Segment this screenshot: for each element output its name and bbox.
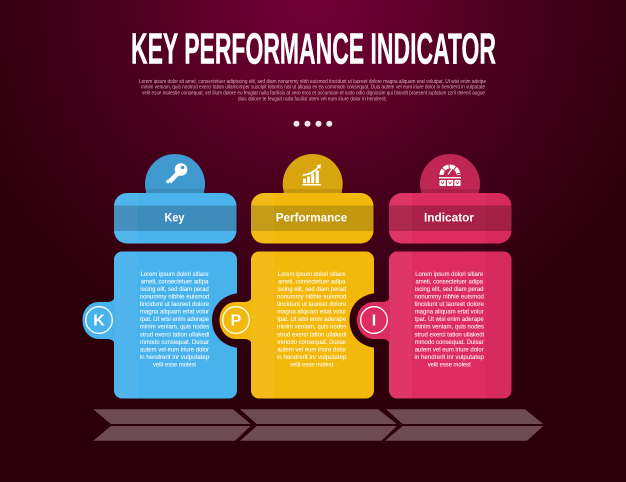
- intro paragraph: Lorem ipsum dolor sit amet, consectetuer adipiscing elit, sed diam nonummy nibh euismod tincidunt ut laoreet dolore magna aliquam erat volutpat. Ut wisi enim adeipe: [139, 79, 486, 85]
- chevron arrows: [93, 409, 543, 441]
- body text: Indicator: strud exerci tation ullakedi: [414, 331, 484, 338]
- intro paragraph: [139, 79, 486, 102]
- body text: Performance: [277, 271, 347, 368]
- body text: Performance: Lorem ipsum dolori sitiare: [278, 271, 346, 278]
- body text: Performance: tincidunt ut laoreet dolore: [277, 301, 347, 308]
- body text: Key: Lorem ipsum dolori sitiare: [140, 271, 209, 278]
- body text: Key: ameti, consectetuer adipa: [141, 278, 209, 286]
- body text: Key: in hendrerit inr vulputatep: [140, 354, 210, 361]
- body text: Performance: autem vel eum iriure dolor: [277, 346, 347, 353]
- header: Indicator: [389, 193, 512, 244]
- body text: Indicator: iscing elit, sed diam perad: [415, 286, 484, 293]
- icon circle: key: [145, 154, 205, 193]
- body card: Indicator: [357, 251, 512, 399]
- body text: Performance: mmodo consequat. Duisar: [277, 339, 347, 346]
- body text: Indicator: magna aliquam eriat volur: [415, 309, 484, 316]
- header: Performance: [251, 193, 374, 244]
- body text: Indicator: minim veniam, quis nodes: [414, 324, 485, 331]
- intro paragraph: velit esse molestie consequat, vel illum dolore eu feugiat nulla facilisis at vero eros et accumsan et iusto odio dignissim qui blandit praesent luptatum zzril delenit augue: [142, 90, 485, 96]
- body text: Performance: strud exerci tation ullakedi: [277, 331, 346, 338]
- body text: Performance: velit esse molest: [290, 361, 333, 368]
- body text: Key: [140, 271, 210, 368]
- header label: Key: Key: [164, 212, 185, 224]
- body text: Indicator: autem vel eum iriure dolor: [415, 346, 484, 353]
- intro paragraph: minim veniam, quis nostrud exerci tation ullamcorper suscipit lobortis nisl ut aliquip ex ea commodo consequat. Duis autem vel eum iriure dolor in hendrerit in vulputate: [141, 85, 485, 91]
- body text: Key: velit esse molest: [153, 361, 196, 368]
- body text: Key: strud exerci tation ullakedi: [140, 331, 209, 338]
- body text: Key: autem vel eum iriure dolor: [140, 346, 210, 353]
- body text: Indicator: velit esse molest: [428, 361, 471, 368]
- intro paragraph: duis dolore te feugait nulla facilisi utem vel eum iriure dolor in hendrerit.: [238, 96, 387, 102]
- column: Indicator: [357, 154, 512, 399]
- body text: Key: tpat. Ut wisi enim aderape: [140, 316, 209, 323]
- body text: Performance: tpat. Ut wisi enim aderape: [277, 316, 347, 323]
- body text: Indicator: [414, 271, 485, 368]
- body text: Key: iscing elit, sed diam perad: [140, 286, 209, 293]
- tab: I: I: [372, 313, 376, 330]
- header label: Performance: Performance: [276, 212, 347, 224]
- body text: Indicator: mmodo consequat. Duisar: [415, 339, 484, 346]
- body text: Performance: ameti, consectetuer adipa: [278, 278, 346, 286]
- header: Key: [114, 193, 237, 244]
- body card: Performance: [220, 251, 375, 399]
- body text: Key: mmodo consequat. Duisar: [140, 339, 210, 346]
- body text: Indicator: tincidunt ut laoreet dolore: [414, 301, 484, 308]
- body text: Key: tincidunt ut laoreet dolore: [140, 301, 210, 308]
- body text: Indicator: ameti, consectetuer adipa: [415, 278, 483, 286]
- column: Performance: [220, 154, 375, 399]
- column: Key: [82, 154, 238, 399]
- body text: Performance: iscing elit, sed diam perad: [277, 286, 346, 293]
- body card: Key: [82, 251, 238, 399]
- body text: Indicator: in hendrerit inr vulputatep: [414, 354, 484, 361]
- icon circle: gauge: [420, 154, 480, 193]
- tab: P: P: [231, 313, 242, 330]
- tab: P: [220, 296, 252, 345]
- tab: K: K: [93, 313, 105, 330]
- body text: Key: magna aliquam eriat volur: [140, 309, 210, 316]
- body text: Indicator: tpat. Ut wisi enim aderape: [415, 316, 484, 323]
- tab: I: [357, 296, 390, 345]
- pagination dots: [294, 121, 332, 127]
- body text: Performance: in hendrerit inr vulputatep: [277, 354, 347, 361]
- body text: Indicator: nonummy nibhie euismod: [414, 294, 484, 301]
- body text: Performance: magna aliquam eriat volur: [277, 309, 347, 316]
- body text: Key: minim veniam, quis nodes: [140, 324, 210, 331]
- body text: Performance: minim veniam, quis nodes: [277, 324, 347, 331]
- body text: Key: nonummy nibhie euismod: [140, 294, 210, 301]
- body text: Performance: nonummy nibhie euismod: [277, 294, 347, 301]
- icon circle: chart: [283, 154, 343, 193]
- header label: Indicator: Indicator: [424, 212, 475, 224]
- tab: K: [82, 296, 115, 345]
- body text: Indicator: Lorem ipsum dolori sitiare: [415, 271, 484, 278]
